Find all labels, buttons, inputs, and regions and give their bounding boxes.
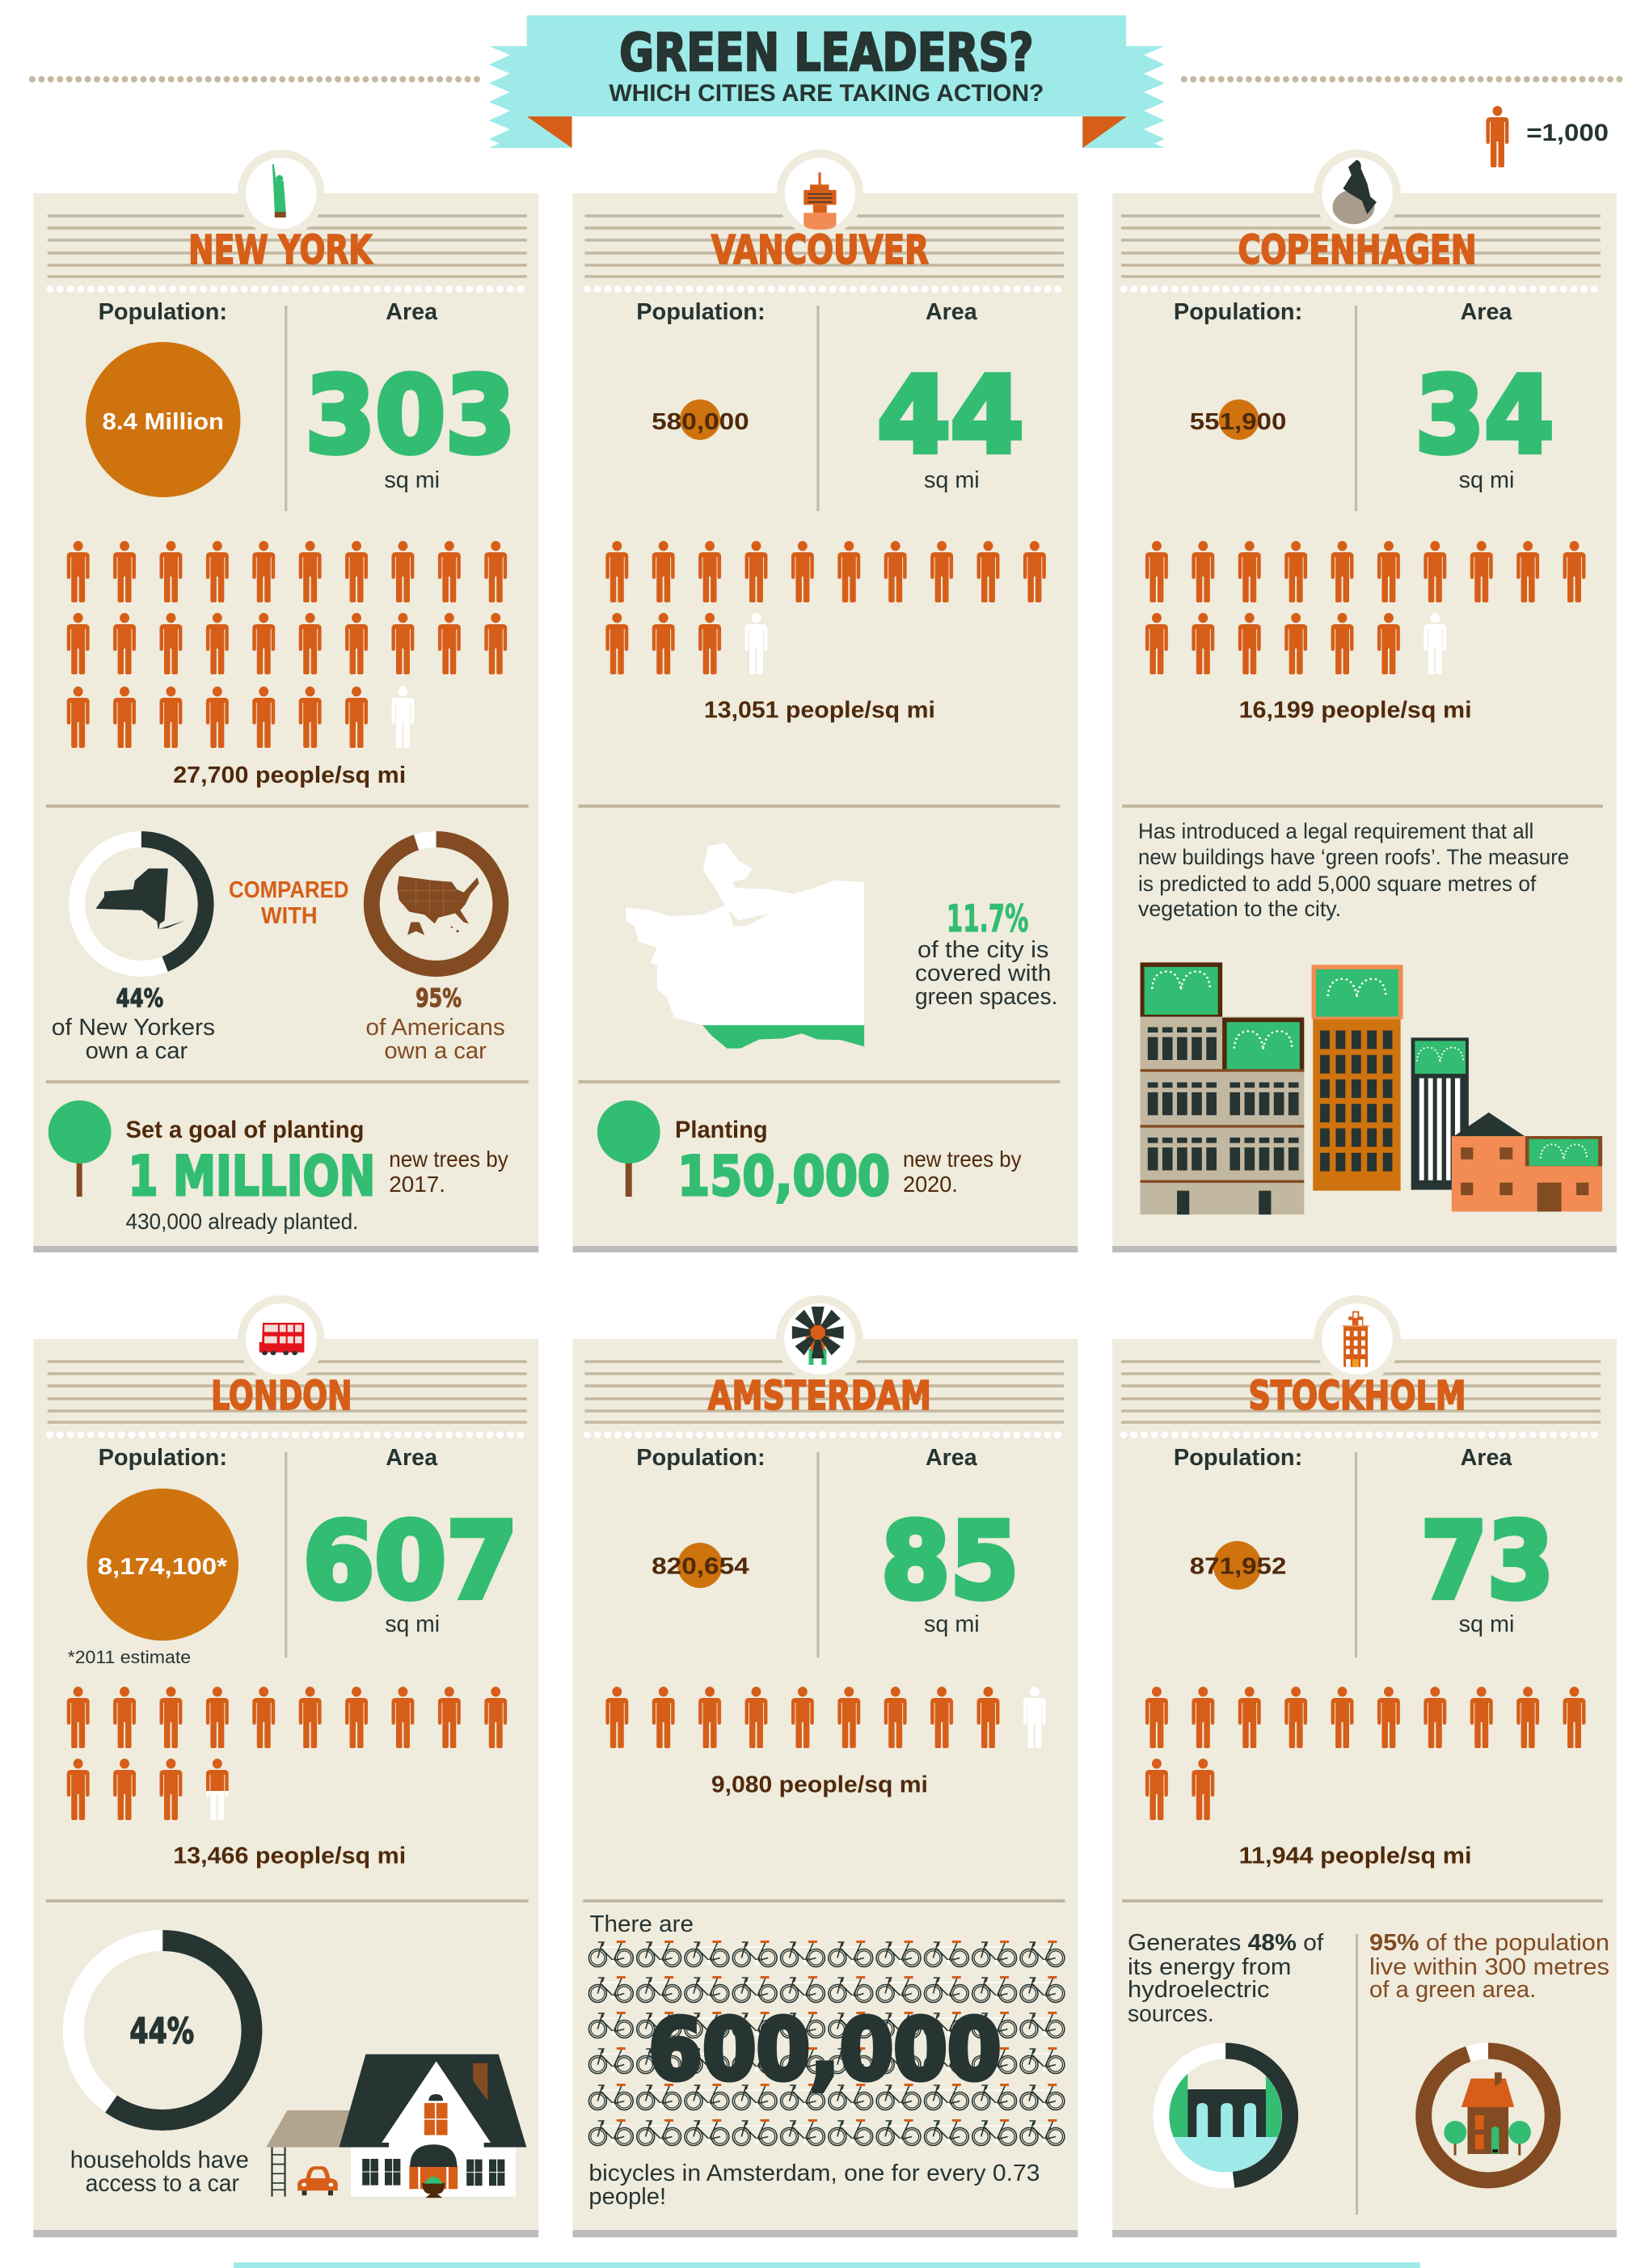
area unit: sq mi xyxy=(385,1611,440,1637)
tree goal: new trees by xyxy=(389,1147,508,1172)
map: Vancouver green space xyxy=(626,843,864,1049)
city name: VANCOUVER xyxy=(711,227,929,273)
tree goal: 430,000 already planted. xyxy=(125,1209,358,1234)
text: bicycles in Amsterdam: people! xyxy=(588,2184,666,2210)
donut: hydroelectric with dam xyxy=(1161,2050,1290,2180)
stat: green space: of the city is xyxy=(917,937,1048,963)
density label: 16,199 people/sq mi xyxy=(1239,697,1472,724)
text: green area access xyxy=(1369,1930,1609,2003)
text: there are: There are xyxy=(589,1911,694,1937)
map: New York state xyxy=(95,868,184,929)
icon: little mermaid xyxy=(1332,160,1377,224)
donut: New Yorkers own a car xyxy=(77,839,206,969)
panel: London xyxy=(33,1295,538,2237)
population circle xyxy=(1190,399,1286,440)
area label: Area xyxy=(386,1445,438,1471)
households text: access to a car xyxy=(86,2170,239,2197)
stat: green space: covered with xyxy=(915,961,1051,986)
area label: Area xyxy=(926,299,978,325)
area unit: sq mi xyxy=(924,467,980,493)
tree goal: 150,000 xyxy=(677,1145,890,1209)
text: bicycles in Amsterdam xyxy=(588,2160,1040,2210)
tree goal: 2020. xyxy=(903,1172,958,1197)
population circle xyxy=(1190,1541,1286,1590)
green roofs text: vegetation to the city. xyxy=(1138,897,1341,921)
area label: Area xyxy=(1461,1445,1512,1471)
stat: green space: green spaces. xyxy=(915,984,1057,1010)
donut: Americans own a car xyxy=(372,839,500,969)
population circle: 580,000 xyxy=(652,409,749,435)
tree goal xyxy=(675,1117,1022,1209)
population label: Population: xyxy=(99,1445,227,1471)
text: green area access: live within 300 metres xyxy=(1369,1954,1609,1980)
legend: one figure equals 1,000 xyxy=(1486,106,1609,167)
population label: Population: xyxy=(1174,299,1302,325)
area label: Area xyxy=(1461,299,1512,325)
icon: tree xyxy=(49,1100,112,1197)
population label: Population: xyxy=(1174,1445,1302,1471)
text: hydroelectric energy xyxy=(1128,1930,1324,2027)
population circle: 8.4 Million xyxy=(103,409,224,435)
header banner xyxy=(32,15,1628,148)
population label: Population: xyxy=(99,299,227,325)
area number: 303 xyxy=(306,354,516,477)
households text xyxy=(70,2147,249,2197)
ribbon folds xyxy=(527,116,1127,148)
subtitle: WHICH CITIES ARE TAKING ACTION? xyxy=(609,80,1044,107)
population circle xyxy=(87,1489,238,1641)
density label: 13,466 people/sq mi xyxy=(173,1843,406,1869)
area unit: sq mi xyxy=(1459,467,1514,493)
map: United States xyxy=(397,876,479,935)
icon: double-decker bus xyxy=(259,1323,304,1355)
text: green area access: 95% of the population xyxy=(1369,1930,1609,1956)
pictogram: bicycles xyxy=(588,1941,1065,2146)
population circle xyxy=(652,1543,749,1588)
pictogram: density xyxy=(605,541,1046,674)
text: green area access: of a green area. xyxy=(1369,1977,1536,2003)
city name: LONDON xyxy=(211,1373,352,1419)
icon: harbour tower xyxy=(804,172,837,230)
stat: green space xyxy=(915,897,1057,1010)
donut: green area with house xyxy=(1424,2050,1553,2180)
panel: New York xyxy=(33,150,538,1252)
population label: Population: xyxy=(636,299,766,325)
icon: tree xyxy=(597,1100,660,1197)
pictogram: density xyxy=(1145,1687,1585,1820)
area number: 607 xyxy=(303,1500,518,1623)
density label: 11,944 people/sq mi xyxy=(1239,1843,1472,1869)
area unit: sq mi xyxy=(924,1611,980,1637)
text: hydroelectric energy: its energy from xyxy=(1128,1954,1291,1980)
compared with xyxy=(229,877,348,929)
population circle xyxy=(86,342,240,497)
density label: 27,700 people/sq mi xyxy=(173,762,406,788)
icon: windmill xyxy=(792,1307,844,1365)
city name: STOCKHOLM xyxy=(1249,1373,1466,1419)
building: ochre tower xyxy=(1312,965,1403,1191)
area number: 34 xyxy=(1415,354,1554,477)
population label: Population: xyxy=(636,1445,766,1471)
green roofs text: new buildings have ‘green roofs’. The measure xyxy=(1138,845,1569,869)
area number: 85 xyxy=(881,1500,1019,1623)
big number: bicycles: 600,000 xyxy=(648,2002,1002,2099)
pictogram: density xyxy=(1145,541,1585,674)
pictogram: density xyxy=(67,541,507,748)
compared with: COMPARED xyxy=(229,877,348,903)
pictogram: density xyxy=(605,1687,1046,1748)
density label: 9,080 people/sq mi xyxy=(711,1772,928,1798)
city name: AMSTERDAM xyxy=(708,1373,931,1419)
city name: COPENHAGEN xyxy=(1238,227,1477,273)
compared with: WITH xyxy=(261,903,318,929)
stat: 95 percent xyxy=(365,984,505,1064)
density label: 13,051 people/sq mi xyxy=(704,697,935,724)
population circle xyxy=(652,399,749,440)
tree goal: 1 MILLION xyxy=(128,1145,375,1209)
stat: 95 percent: own a car xyxy=(384,1038,487,1064)
stat: 95 percent: 95% xyxy=(415,984,462,1013)
population circle: 820,654 xyxy=(652,1553,749,1580)
city name: NEW YORK xyxy=(188,227,373,273)
text: hydroelectric energy: hydroelectric xyxy=(1128,1977,1269,2003)
stat: 44 percent: of New Yorkers xyxy=(52,1015,215,1041)
panel: Amsterdam xyxy=(572,1295,1078,2237)
icon: statue of liberty xyxy=(272,164,286,218)
population circle: 8,174,100* xyxy=(98,1554,228,1580)
tree goal: Set a goal of planting xyxy=(125,1117,364,1143)
text: bicycles in Amsterdam: bicycles in Amsterdam, one for every 0.73 xyxy=(588,2160,1040,2186)
panel: Vancouver xyxy=(572,150,1078,1252)
building: orange house xyxy=(1452,1113,1602,1211)
illustration: buildings with green roofs xyxy=(1141,962,1602,1214)
building: striped tower xyxy=(1411,1037,1469,1190)
icon: Stockholm townhouse xyxy=(1343,1311,1369,1367)
footer bar xyxy=(234,2262,1420,2268)
tree goal: Planting xyxy=(675,1117,768,1143)
area label: Area xyxy=(926,1445,978,1471)
tree goal: 2017. xyxy=(389,1172,445,1197)
footnote: *2011 estimate xyxy=(68,1647,191,1667)
tree goal: new trees by xyxy=(903,1147,1022,1172)
stat: 44 percent xyxy=(52,984,215,1064)
area number: 44 xyxy=(877,354,1024,477)
stat: green space: 11.7% xyxy=(947,897,1028,940)
stat: 44 percent: own a car xyxy=(86,1038,188,1064)
green roofs text: Has introduced a legal requirement that all xyxy=(1138,819,1533,843)
area number: 73 xyxy=(1421,1500,1554,1623)
green roofs text xyxy=(1138,819,1569,921)
stat: 44 percent: 44% xyxy=(116,984,163,1013)
population circle: 871,952 xyxy=(1190,1553,1286,1580)
area unit: sq mi xyxy=(384,467,440,493)
green roofs text: is predicted to add 5,000 square metres of xyxy=(1138,872,1537,896)
panel: Copenhagen xyxy=(1112,150,1617,1252)
households text: households have xyxy=(70,2147,249,2173)
text: hydroelectric energy: sources. xyxy=(1128,2001,1214,2027)
illustration: dam xyxy=(1169,2073,1282,2172)
building: grey block xyxy=(1141,962,1304,1214)
stat: 44 percent: 44% xyxy=(129,2011,194,2052)
illustration: house and trees xyxy=(1444,2072,1531,2156)
panel: Stockholm xyxy=(1112,1295,1617,2237)
area label: Area xyxy=(386,299,438,325)
population circle: 551,900 xyxy=(1190,409,1286,435)
ribbon tails xyxy=(489,15,1165,148)
area unit: sq mi xyxy=(1459,1611,1514,1637)
legend: one figure equals 1,000: =1,000 xyxy=(1526,120,1609,146)
text: hydroelectric energy: Generates 48% of xyxy=(1128,1930,1324,1956)
pictogram: density xyxy=(67,1687,507,1820)
tree goal xyxy=(125,1117,508,1234)
stat: 95 percent: of Americans xyxy=(365,1015,505,1041)
illustration: house and car xyxy=(266,2055,526,2198)
donut: households with a car xyxy=(74,1941,252,2120)
title: GREEN LEADERS? xyxy=(619,23,1033,83)
